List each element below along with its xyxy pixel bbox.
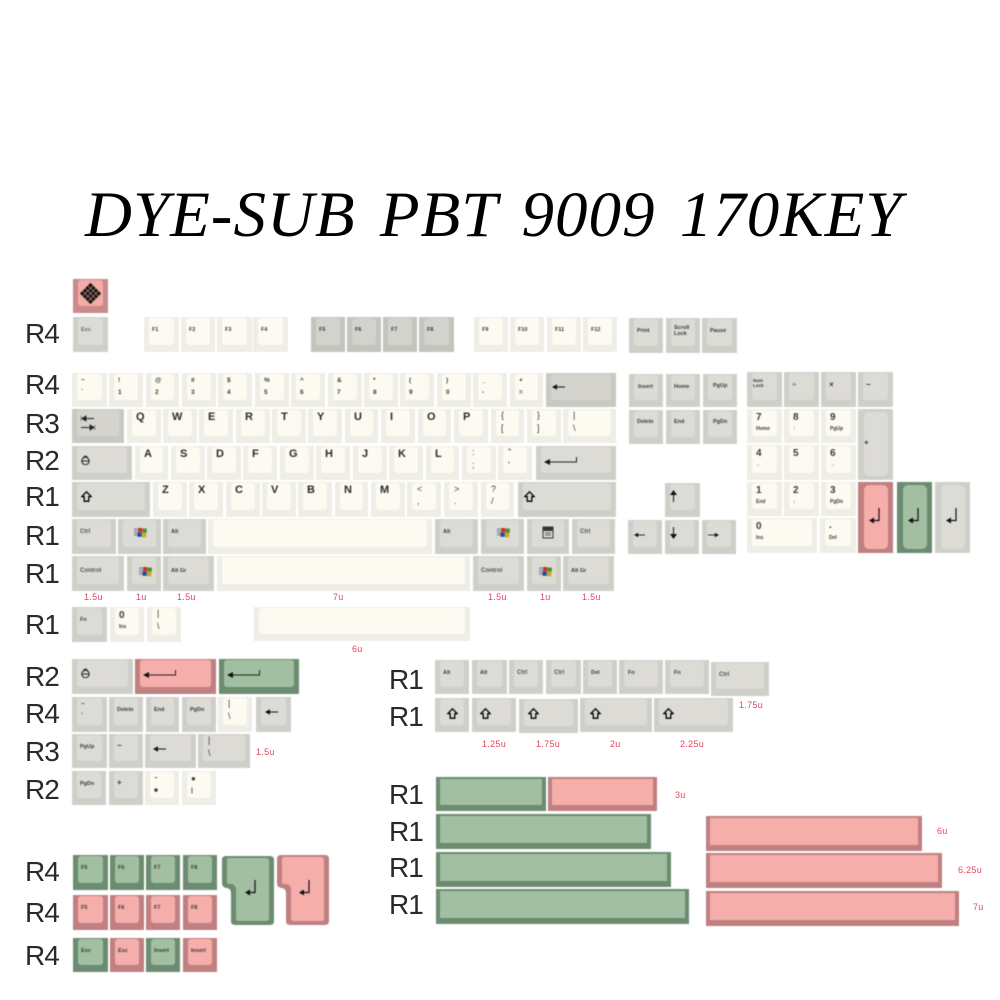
R2 extras lower row: ■: [154, 787, 158, 794]
function key row: F6: [355, 327, 361, 333]
QWERTY row: {: [501, 410, 504, 420]
keys: F9-F12 cream: F9: [482, 327, 488, 333]
pink F keys: F7: [154, 905, 160, 911]
navigation cluster: Insert: [638, 384, 653, 390]
key: pink ISO enter: [277, 855, 329, 925]
function key row: F12: [591, 327, 600, 333]
row label: R3 extras: R3: [25, 736, 59, 767]
R4 extras row: [72, 696, 292, 732]
QWERTY row: U: [354, 411, 362, 423]
ZXCV row: X: [198, 484, 205, 496]
ZXCV row: [72, 482, 616, 518]
numpad: Num: [753, 378, 763, 383]
R3 extras row: \: [208, 748, 211, 758]
bottom row with 7u space: Alt: [443, 529, 450, 535]
numpad: 2: [793, 485, 799, 496]
bar: green 7u: [436, 889, 689, 924]
row label: R1 bar 6u: R1: [389, 816, 423, 847]
numpad: 6: [830, 448, 836, 459]
QWERTY row: O: [427, 411, 436, 423]
green F keys: F8: [191, 865, 197, 871]
function key row: F4: [261, 327, 267, 333]
Esc and Insert colored keys: Esc: [118, 948, 128, 954]
key: backspace: [546, 373, 616, 407]
R1 modifier keys row: Ctrl: [719, 672, 729, 678]
ZXCV row: .: [454, 496, 457, 506]
numpad: [746, 372, 970, 554]
bottom row with 7u space, alternative: Alt Gr: [171, 568, 186, 574]
key: pink enter: [135, 659, 216, 694]
ISO enter keys green and pink: [221, 854, 330, 926]
navigation cluster: [628, 374, 738, 444]
Fn row with 6u space: Fn: [80, 617, 87, 623]
ASDF row: H: [325, 448, 333, 460]
navigation cluster: PgDn: [713, 419, 727, 425]
numpad: ←: [756, 462, 761, 468]
title: DYE-SUB PBT 9009 170KEY: [85, 179, 902, 251]
bottom row with 7u space, alternative: [72, 556, 614, 592]
Fn row with 6u space: [72, 606, 470, 642]
size label: 1.75u: [739, 700, 763, 710]
function key row: F10: [518, 327, 527, 333]
number row: 2: [155, 389, 159, 396]
key: left shift: [72, 482, 150, 517]
number row: 4: [227, 389, 231, 396]
QWERTY row: I: [390, 411, 393, 423]
ZXCV row: >: [454, 484, 459, 494]
R1 modifier keys row: Ctrl: [517, 670, 527, 676]
numpad: Ins: [756, 535, 763, 541]
number row: 8: [373, 389, 377, 396]
bottom row with 7u space: Ctrl: [580, 529, 590, 535]
size label: 2.25u: [680, 739, 704, 749]
Esc and Insert colored keys: Insert: [154, 948, 169, 954]
keys: Print Scroll Pause: Print: [637, 328, 650, 334]
size label: 3u: [675, 790, 686, 800]
QWERTY row: W: [172, 411, 182, 423]
number row: 6: [300, 389, 304, 396]
numpad: 0: [756, 521, 762, 532]
keys: F9-F12 cream: [474, 317, 508, 352]
R2 extras lower row: PgDn: [80, 781, 94, 787]
bar: pink 7u: [706, 891, 959, 926]
Esc and Insert colored keys: Insert: [191, 948, 206, 954]
R2 extras lower row: +: [117, 778, 122, 787]
row label: R1 bar 7u: R1: [389, 889, 423, 920]
ZXCV row: N: [344, 484, 352, 496]
function key row: F3: [225, 327, 231, 333]
R4 extras row: \: [228, 711, 231, 721]
R3 extras row: |: [208, 735, 210, 745]
R1 modifier keys row: [434, 660, 770, 696]
number row: (: [409, 377, 411, 384]
numpad: Lock: [753, 383, 764, 388]
R4 extras row: `: [81, 713, 83, 720]
function key row: F8: [427, 327, 433, 333]
R1 modifier keys row: Fn: [674, 670, 681, 676]
size label: 6u: [937, 826, 948, 836]
numpad: PgUp: [830, 426, 843, 432]
function key row: Scroll: [674, 325, 689, 331]
key: menu: [527, 519, 569, 554]
size label: 1u: [540, 592, 551, 602]
pink F keys: [72, 894, 218, 931]
ZXCV row: M: [380, 484, 389, 496]
size label: 1.75u: [536, 739, 560, 749]
ASDF row: [72, 446, 616, 480]
QWERTY row: [72, 408, 616, 444]
row label: R4 pink: R4: [25, 897, 59, 928]
keys: Print Scroll Pause: [629, 318, 663, 353]
row label: R4 extras: R4: [25, 698, 59, 729]
bottom row with 7u space, alternative: Alt Gr: [571, 568, 586, 574]
key: green ISO enter: [222, 856, 274, 925]
row label: R1 bar 6.25u: R1: [389, 852, 423, 883]
R3 extras row: PgUp: [80, 744, 94, 750]
QWERTY row: P: [463, 411, 470, 423]
key: green numpad enter: [897, 482, 932, 553]
size label: 2u: [610, 739, 621, 749]
R2 extras lower row: ●: [191, 774, 196, 783]
navigation cluster: Delete: [637, 419, 654, 425]
numpad: ↓: [793, 499, 796, 505]
QWERTY row: |: [573, 410, 575, 420]
size label: 1.5u: [488, 592, 507, 602]
row label: R1 shifts: R1: [389, 701, 423, 732]
ZXCV row: ?: [491, 484, 496, 494]
ASDF row: ': [508, 460, 510, 470]
key: numpad plus: +: [864, 438, 869, 447]
green F keys: [72, 854, 218, 891]
bottom row with 7u space: Ctrl: [80, 529, 90, 535]
numpad: →: [830, 462, 835, 468]
keys: F1-F4 cream: F1: [152, 327, 158, 333]
numpad: 9: [830, 412, 836, 423]
number row: =: [519, 389, 523, 396]
pink F keys: F5: [81, 905, 87, 911]
numpad: 3: [830, 485, 836, 496]
number row: *: [373, 377, 376, 384]
QWERTY row: Q: [136, 411, 145, 423]
ASDF row: ": [508, 447, 511, 457]
QWERTY row: [: [501, 423, 504, 433]
row label: R4 number row: R4: [25, 369, 59, 400]
size label: 6u: [352, 644, 363, 654]
numpad: −: [866, 380, 871, 389]
ZXCV row: C: [235, 484, 243, 496]
ASDF row: :: [472, 447, 475, 457]
function key row: Pause: [710, 328, 726, 334]
bar: pink 3u: [548, 777, 657, 811]
bar: green 6.25u: [436, 852, 671, 887]
key: enter: [536, 446, 616, 480]
keys: F1-F4 cream: [144, 317, 179, 352]
ZXCV row: /: [491, 496, 494, 506]
numpad: 5: [793, 448, 799, 459]
numpad: 1: [756, 485, 762, 496]
R2 extras lower row: |: [191, 787, 193, 794]
green F keys: F5: [81, 865, 87, 871]
number row: `: [81, 389, 83, 396]
row label: R4 green: R4: [25, 856, 59, 887]
number row: !: [118, 377, 120, 384]
row label: R1 bar 3u: R1: [389, 779, 423, 810]
bar: pink 6.25u: [706, 853, 942, 888]
number row: %: [264, 377, 270, 384]
number row: _: [482, 377, 486, 384]
numpad: Del: [829, 535, 837, 541]
ASDF row: S: [180, 448, 187, 460]
QWERTY row: R: [245, 411, 253, 423]
ASDF row: K: [398, 448, 406, 460]
number row: $: [227, 377, 231, 384]
QWERTY row: }: [537, 410, 540, 420]
size label: 1.5u: [177, 592, 196, 602]
key: tab: [72, 409, 124, 443]
ASDF row: J: [362, 448, 368, 460]
R4 extras row: PgDn: [190, 707, 204, 713]
key: 6u spacebar: [254, 607, 470, 641]
R1 modifier keys row: Ctrl: [554, 670, 564, 676]
key: Esc: Esc: [81, 327, 91, 333]
bottom row with 7u space: Alt: [171, 529, 178, 535]
number row: 7: [337, 389, 341, 396]
key: right arrow: [702, 520, 736, 554]
number row: 9: [409, 389, 413, 396]
R4 extras row: ~: [81, 701, 85, 708]
size label: 1.5u: [582, 592, 601, 602]
R1 shift keys row: [434, 698, 734, 734]
size label: 1.25u: [482, 739, 506, 749]
R4 extras row: Delete: [117, 707, 134, 713]
number row: -: [482, 389, 484, 396]
R2 extras lower row: [72, 770, 216, 806]
row label: R2: R2: [25, 445, 59, 476]
R2 caps and enter keys: [72, 658, 300, 695]
row label: R1: R1: [25, 481, 59, 512]
keys: F5-F8 gray: [311, 317, 345, 352]
function key row: Lock: [674, 331, 687, 337]
key: pink numpad enter: [858, 482, 893, 553]
number row: ^: [300, 377, 304, 384]
size label: 7u: [333, 592, 344, 602]
key: spacebar: [208, 519, 432, 554]
number row: ~: [81, 377, 85, 384]
row label: R3: R3: [25, 408, 59, 439]
number row: @: [155, 377, 161, 384]
key: gray numpad enter: [935, 482, 970, 553]
size label: 1.5u: [84, 592, 103, 602]
size label: 1u: [136, 592, 147, 602]
R1 modifier keys row: Del: [591, 670, 600, 676]
Fn row with 6u space: |: [157, 608, 159, 618]
numpad: 8: [793, 412, 799, 423]
row label: R1 ctrl: R1: [25, 520, 59, 551]
number row: #: [191, 377, 195, 384]
navigation cluster: Home: [674, 384, 689, 390]
logo key: [72, 278, 109, 314]
green F keys: F7: [154, 865, 160, 871]
size label: 1.5u: [256, 747, 275, 757]
ZXCV row: <: [417, 484, 422, 494]
key: numpad plus: [858, 409, 893, 480]
key: windows logo: [118, 519, 161, 554]
ZXCV row: ,: [417, 496, 420, 506]
Esc and Insert colored keys: [72, 937, 218, 973]
QWERTY row: E: [208, 411, 215, 423]
numpad: .: [829, 520, 832, 531]
Fn row with 6u space: Ins: [119, 624, 126, 630]
numpad: ↑: [793, 426, 796, 432]
number row: 5: [264, 389, 268, 396]
row label: R1 modifiers: R1: [389, 664, 423, 695]
numpad: 7: [756, 412, 762, 423]
R1 modifier keys row: Alt: [480, 670, 487, 676]
bar: green 6u: [436, 814, 651, 849]
row label: R4 esc: R4: [25, 940, 59, 971]
row label: R4 function row: R4: [25, 318, 59, 349]
QWERTY row: ]: [537, 423, 540, 433]
key: right shift: [518, 482, 616, 517]
pink F keys: F6: [118, 905, 124, 911]
R3 extras row: −: [117, 741, 122, 750]
R2 extras lower row: ~: [154, 775, 158, 782]
R4 extras row: End: [154, 707, 164, 713]
ZXCV row: V: [271, 484, 278, 496]
keys: F5-F8 gray: F5: [319, 327, 325, 333]
key: caps lock: [72, 446, 132, 480]
function key row: F11: [555, 327, 564, 333]
function key row: F2: [189, 327, 195, 333]
number row: [72, 372, 616, 408]
number row: 0: [446, 389, 450, 396]
ASDF row: G: [289, 448, 298, 460]
Esc and Insert colored keys: Esc: [81, 948, 91, 954]
R3 extras row: [72, 734, 250, 768]
key: green enter: [219, 659, 299, 694]
number row: 3: [191, 389, 195, 396]
navigation cluster: PgUp: [713, 383, 727, 389]
key: Esc: [73, 317, 108, 352]
pink F keys: F8: [191, 905, 197, 911]
key: down arrow: [665, 520, 699, 554]
QWERTY row: T: [281, 411, 288, 423]
ASDF row: ;: [472, 460, 475, 470]
ASDF row: L: [435, 448, 442, 460]
size label: 6.25u: [958, 865, 982, 875]
key: left arrow: [628, 520, 662, 554]
Fn row with 6u space: 0: [119, 610, 125, 621]
key: spacebar: [217, 556, 470, 591]
row label: R2 extras lower: R2: [25, 774, 59, 805]
ZXCV row: Z: [162, 484, 169, 496]
row label: R1 control: R1: [25, 558, 59, 589]
Fn row with 6u space: \: [157, 621, 160, 631]
numpad: 4: [756, 448, 762, 459]
numpad: End: [756, 499, 765, 505]
bar: green 3u: [436, 777, 546, 811]
bar: pink 6u: [706, 816, 922, 851]
QWERTY row: Y: [317, 411, 324, 423]
number row: 1: [118, 389, 122, 396]
ASDF row: F: [252, 448, 259, 460]
row label: R2 extras: R2: [25, 661, 59, 692]
numpad: ÷: [792, 380, 796, 389]
number row: ): [446, 377, 448, 384]
number row: +: [519, 377, 523, 384]
ASDF row: A: [144, 448, 152, 460]
ZXCV row: B: [307, 484, 315, 496]
colored long spacebars: [435, 776, 960, 927]
size label: 7u: [973, 902, 984, 912]
QWERTY row: \: [573, 423, 576, 433]
navigation cluster: End: [674, 419, 684, 425]
arrow keys cluster: [628, 482, 736, 554]
bottom row with 7u space, alternative: Control: [481, 568, 502, 574]
R1 modifier keys row: Alt: [443, 670, 450, 676]
numpad: PgDn: [830, 499, 843, 505]
key: up arrow: [665, 483, 700, 517]
bottom row with 7u space: [72, 518, 616, 554]
ASDF row: D: [216, 448, 224, 460]
function key row: F7: [391, 327, 397, 333]
function key row: [72, 316, 738, 354]
row label: R1 fn: R1: [25, 609, 59, 640]
green F keys: F6: [118, 865, 124, 871]
R1 modifier keys row: Fn: [628, 670, 635, 676]
numpad: ×: [829, 380, 834, 389]
number row: &: [337, 377, 342, 384]
numpad: Home: [756, 426, 770, 432]
R4 extras row: |: [228, 698, 230, 708]
bottom row with 7u space, alternative: Control: [80, 568, 101, 574]
